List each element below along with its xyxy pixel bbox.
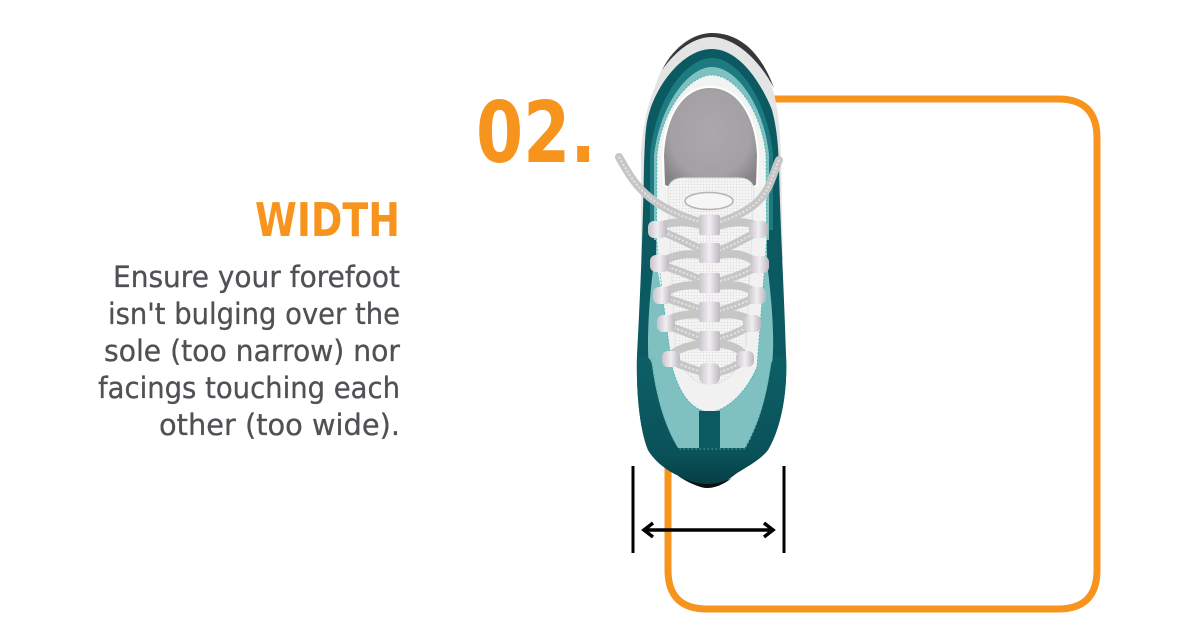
heel outer rim (641, 33, 783, 260)
orange frame (668, 99, 1097, 609)
right measure bar (782, 466, 786, 553)
description text: isn't bulging over the (108, 297, 400, 331)
lace loops sides (648, 221, 769, 367)
white collar (656, 75, 767, 300)
description text: other (too wide). (159, 408, 400, 442)
shoe outer body (637, 49, 786, 487)
heel black edge (662, 33, 774, 88)
toe stitching (652, 358, 771, 449)
heel teal layers (650, 58, 773, 230)
side quarter panels: light teal (648, 255, 773, 448)
double-headed arrow (644, 523, 773, 537)
toe cap shading (637, 355, 786, 487)
tongue mesh (668, 178, 754, 384)
foot opening (663, 87, 758, 190)
description text: facings touching each (98, 371, 400, 405)
lace loops centre (699, 215, 720, 384)
lace texture (619, 157, 779, 374)
width measurement marker (632, 466, 786, 553)
tongue logo oval (685, 192, 733, 210)
shoe illustration (619, 33, 786, 488)
centre toe strip (699, 411, 720, 449)
toe black edge (683, 478, 732, 488)
laces (619, 157, 779, 374)
description text (98, 260, 400, 442)
heading: width: WIDTH (255, 193, 400, 247)
step number: 02. (476, 84, 596, 183)
description text: Ensure your forefoot (113, 260, 400, 294)
white vamp toe (656, 235, 767, 412)
left measure bar (632, 466, 634, 553)
description text: sole (too narrow) nor (104, 334, 400, 368)
